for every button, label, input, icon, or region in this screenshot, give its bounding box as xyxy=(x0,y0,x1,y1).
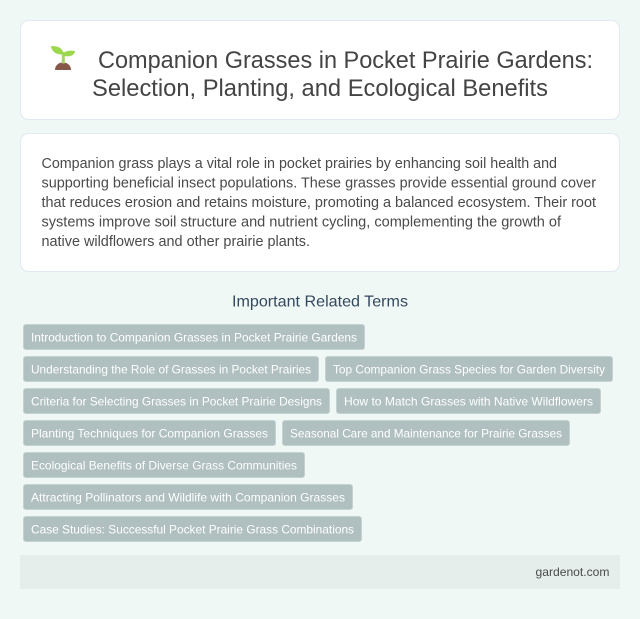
text block: description: supporting beneficial insect populations. These grasses provide essential ground cover xyxy=(42,176,596,192)
panel: introduction text xyxy=(20,134,620,272)
footer: site name: gardenot.com xyxy=(536,565,610,579)
tag: Case Studies: Successful Pocket Prairie Grass Combinations xyxy=(31,522,354,536)
tag: Attracting Pollinators and Wildlife with Companion Grasses xyxy=(31,490,345,504)
title xyxy=(92,47,593,102)
text block: description: Companion grass plays a vital role in pocket prairies by enhancing soil health and xyxy=(42,156,557,172)
tag xyxy=(24,452,304,478)
tag xyxy=(24,484,352,510)
text block: description: systems improve soil structure and nutrient cycling, complementing the growth of xyxy=(42,214,562,230)
tag: Understanding the Role of Grasses in Pocket Prairies xyxy=(31,362,311,376)
tag: Ecological Benefits of Diverse Grass Communities xyxy=(31,458,297,472)
tag list xyxy=(24,324,612,542)
panel: title card xyxy=(20,20,620,120)
title: Companion Grasses in Pocket Prairie Gardens: xyxy=(98,47,593,74)
tag: Introduction to Companion Grasses in Pocket Prairie Gardens xyxy=(31,330,357,344)
tag: Top Companion Grass Species for Garden Diversity xyxy=(333,362,605,376)
text block: description: that reduces erosion and retains moisture, promoting a balanced ecosystem. Their root xyxy=(42,195,596,211)
tag xyxy=(282,420,570,446)
tag: Seasonal Care and Maintenance for Prairie Grasses xyxy=(290,426,562,440)
tag xyxy=(24,420,276,446)
title: Selection, Planting, and Ecological Benefits xyxy=(92,75,548,102)
tag xyxy=(24,324,364,350)
tag xyxy=(24,356,318,382)
text block: description xyxy=(42,156,596,250)
tag: Planting Techniques for Companion Grasses xyxy=(31,426,268,440)
tag xyxy=(24,516,362,542)
tag xyxy=(336,388,600,414)
icon: seedling xyxy=(51,46,75,70)
text block: description: native wildflowers and other prairie plants. xyxy=(42,234,310,250)
tag xyxy=(326,356,612,382)
footer bar xyxy=(20,555,620,589)
tag xyxy=(24,388,330,414)
tag: How to Match Grasses with Native Wildflowers xyxy=(344,394,593,408)
heading: related terms: Important Related Terms xyxy=(232,294,408,310)
tag: Criteria for Selecting Grasses in Pocket Prairie Designs xyxy=(31,394,322,408)
